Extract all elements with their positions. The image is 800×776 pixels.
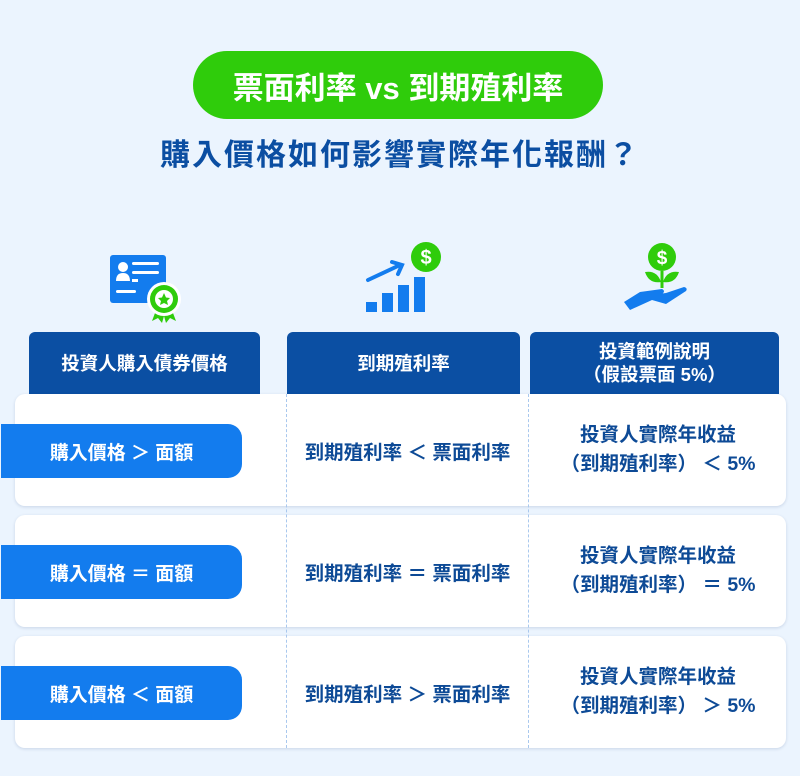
title pill: 票面利率 vs 到期殖利率	[233, 70, 563, 106]
title pill	[193, 51, 603, 119]
header: column 2	[287, 332, 520, 394]
row 3 pill: 購入價格 ＜ 面額	[50, 684, 193, 706]
icon: certificate	[110, 255, 181, 323]
row 1 example: 投資人實際年收益	[580, 424, 736, 446]
row 3 card	[15, 636, 786, 748]
header: column 3	[530, 332, 779, 394]
subtitle: 購入價格如何影響實際年化報酬？	[160, 139, 640, 172]
header: column 3: 投資範例說明	[599, 341, 710, 362]
header: column 3: （假設票面 5%）	[583, 364, 726, 385]
icon: hand with plant: $	[657, 248, 668, 269]
icon: growth chart	[366, 242, 441, 312]
row 3 example: （到期殖利率） ＞ 5%	[560, 695, 756, 717]
icon: growth chart: $	[420, 247, 432, 269]
row 2 example	[560, 545, 756, 596]
header: column 1: 投資人購入債券價格	[61, 352, 228, 374]
row 2 example: 投資人實際年收益	[580, 545, 736, 567]
row 2 pill	[1, 545, 242, 599]
row 3 example	[560, 666, 756, 717]
header: column 2: 到期殖利率	[357, 352, 450, 374]
row 2 card	[15, 515, 786, 627]
row 1 pill: 購入價格 ＞ 面額	[50, 442, 193, 464]
row 2 example: （到期殖利率） ＝ 5%	[560, 574, 756, 596]
row 2 pill: 購入價格 ＝ 面額	[50, 564, 193, 584]
row 1 pill	[1, 424, 242, 478]
header: column 1	[29, 332, 260, 394]
row 3 pill	[1, 666, 242, 720]
row 1 card	[15, 394, 786, 506]
icon: hand with plant	[624, 243, 687, 310]
row 2 yield: 到期殖利率 ＝ 票面利率	[305, 562, 510, 584]
row 1 example	[560, 424, 756, 475]
row 3 example: 投資人實際年收益	[580, 666, 736, 688]
row 1 yield: 到期殖利率 ＜ 票面利率	[305, 442, 510, 464]
row 3 yield: 到期殖利率 ＞ 票面利率	[305, 684, 510, 706]
row 1 example: （到期殖利率） ＜ 5%	[560, 453, 756, 475]
